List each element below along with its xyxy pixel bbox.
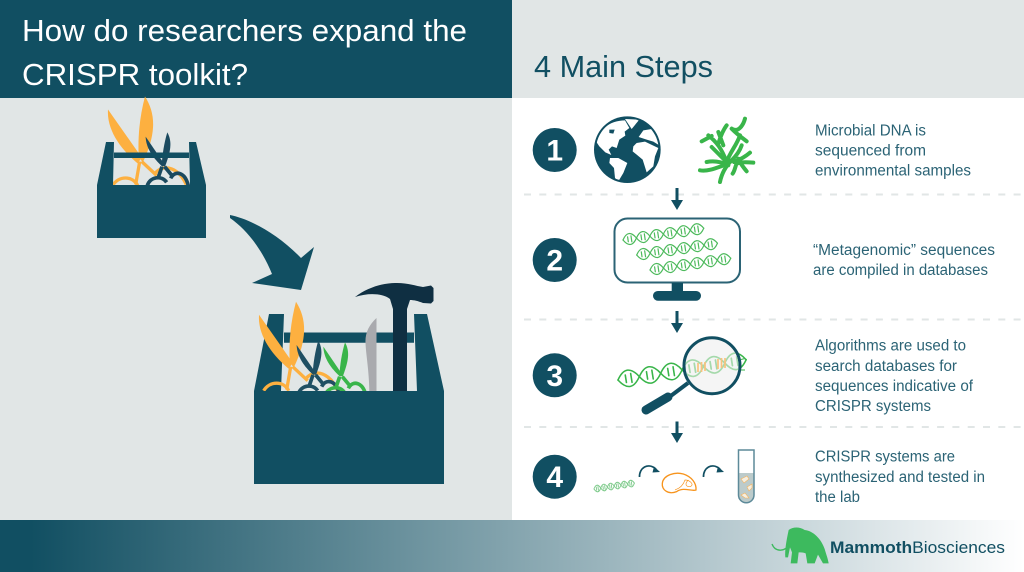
arrow: step 2 to 3 <box>671 311 683 333</box>
tool: knife <box>365 318 376 391</box>
step 3 text: sequences indicative of <box>815 378 974 395</box>
arrow: curved to test tube <box>703 466 724 477</box>
tool: hammer <box>355 283 434 391</box>
step 2 text: “Metagenomic” sequences <box>813 242 995 259</box>
arrow: step 1 to 2 <box>671 188 683 210</box>
step 3 text: search databases for <box>815 358 957 375</box>
step 2 text: are compiled in databases <box>813 262 988 279</box>
step 1 text: environmental samples <box>815 163 971 180</box>
large toolbox <box>254 283 444 484</box>
step 3 text <box>815 338 974 415</box>
step 1 text <box>815 122 971 180</box>
tool: green scissors <box>323 342 366 396</box>
step 4 text: synthesized and tested in <box>815 469 985 486</box>
step dividers <box>524 194 1024 427</box>
title banner: How do researchers expand the <box>22 13 467 48</box>
step 3 number: 3 <box>546 360 563 393</box>
arrow: curved to cell <box>639 466 660 477</box>
heading: 4 main steps: 4 Main Steps <box>534 49 713 84</box>
step 2 text <box>813 242 995 279</box>
icon: small DNA strand <box>594 480 635 492</box>
icon: bacteria <box>700 119 753 182</box>
icon: monitor with DNA <box>614 218 740 301</box>
icon: magnifier over DNA <box>617 338 747 410</box>
toolbox body <box>254 391 444 484</box>
step 4 number <box>533 455 577 499</box>
step 2 number: 2 <box>546 244 563 278</box>
step 3 text: CRISPR systems <box>815 398 931 415</box>
step 1 number: 1 <box>546 134 563 168</box>
title banner <box>0 0 512 98</box>
tool: orange scissors <box>259 302 338 391</box>
logo: mammoth <box>772 527 829 563</box>
left panel background <box>0 98 512 520</box>
step 4 text: the lab <box>815 489 860 506</box>
arrow: step 3 to 4 <box>671 422 683 443</box>
icon: microbe cell <box>662 473 696 493</box>
step 3 number <box>533 353 577 397</box>
step 1 text: sequenced from <box>815 143 926 160</box>
curved arrow <box>230 215 314 290</box>
step 3 text: Algorithms are used to <box>815 338 966 355</box>
step 4 text <box>815 449 985 506</box>
tool: navy scissors <box>297 341 339 394</box>
small toolbox <box>97 96 206 238</box>
icon: globe <box>594 116 661 183</box>
logo: wordmark: MammothBiosciences <box>830 538 1005 557</box>
step 1 text: Microbial DNA is <box>815 122 926 140</box>
right header background <box>512 0 1024 98</box>
footer gradient bar <box>0 520 1024 572</box>
step 1 number <box>533 128 577 172</box>
step 4 number: 4 <box>546 461 563 494</box>
step 2 number <box>533 238 577 282</box>
icon: test tube <box>738 450 754 503</box>
title banner: CRISPR toolkit? <box>22 57 248 92</box>
step 4 text: CRISPR systems are <box>815 449 955 466</box>
